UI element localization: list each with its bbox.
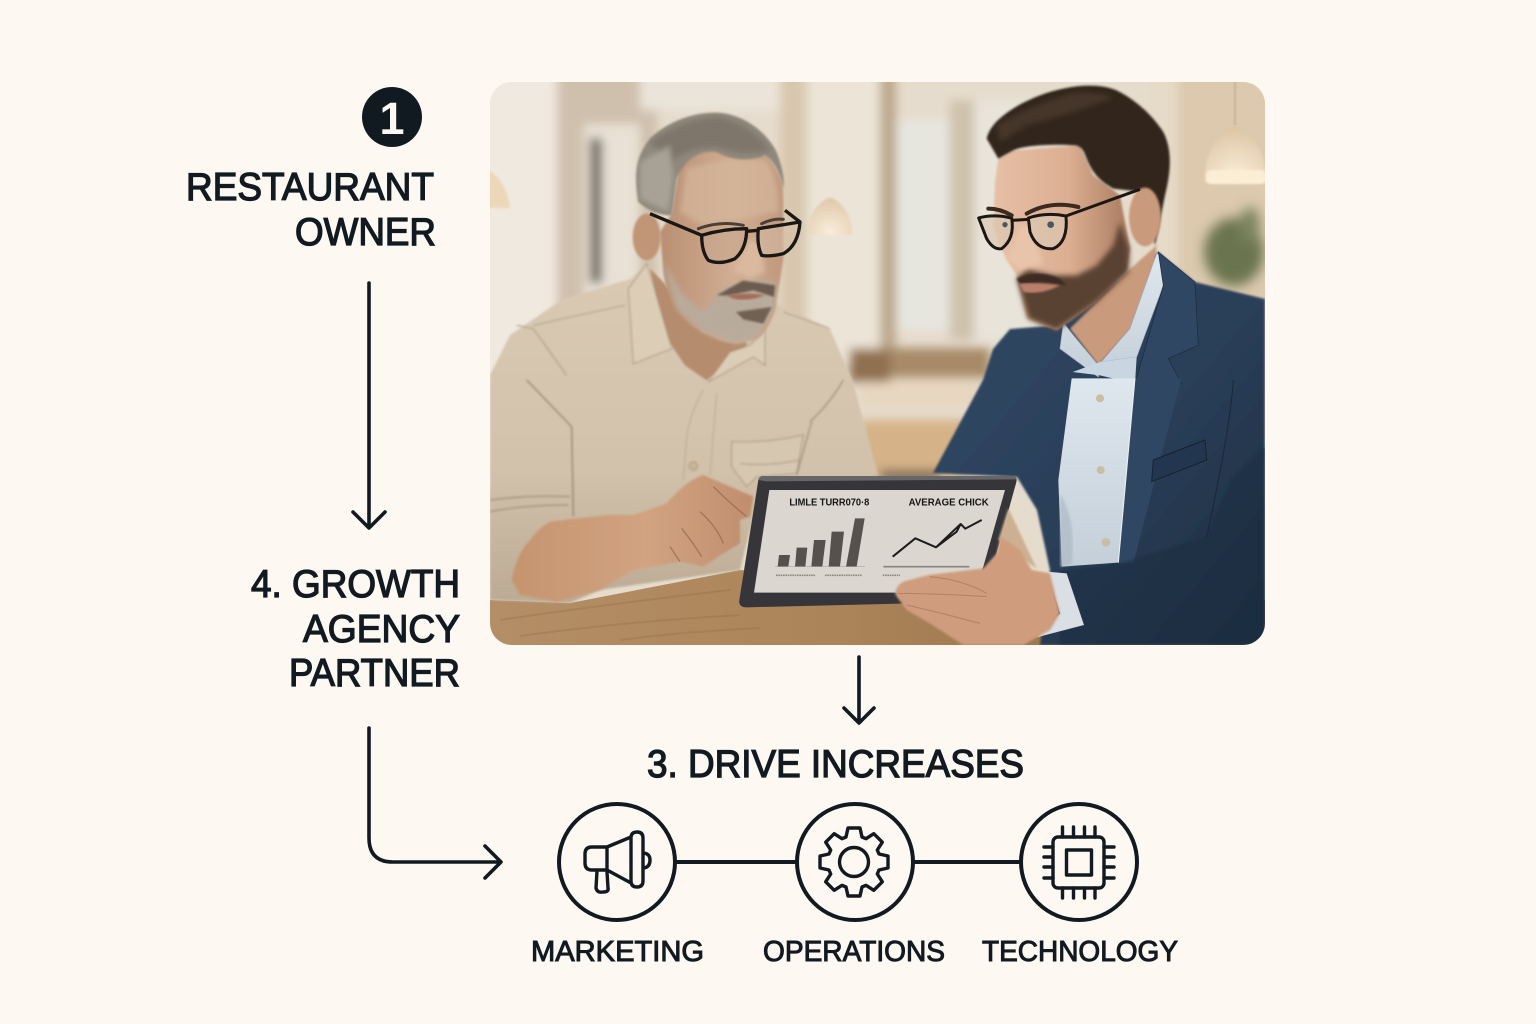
step 1 badge: 1: [379, 93, 405, 144]
man on right: hand holding tablet: [895, 508, 1084, 645]
heading: restaurant owner: RESTAURANT: [186, 166, 434, 209]
pendant lamps: [485, 82, 1266, 235]
dark hair: [987, 86, 1170, 245]
heading: restaurant owner: OWNER: [295, 211, 436, 254]
man on right: jacket: [933, 245, 1265, 645]
label: operations: OPERATIONS: [763, 936, 945, 968]
heading: restaurant owner: [186, 166, 436, 254]
nose: [1011, 226, 1042, 273]
beard: [1017, 222, 1129, 330]
neck: [650, 269, 747, 380]
tablet right chart title: AVERAGE CHICK: [909, 497, 989, 508]
connector lines between pillars: [676, 860, 1020, 864]
icon: megaphone: [559, 804, 675, 920]
heading: growth agency partner: 4. GROWTH: [251, 563, 460, 606]
label: technology: TECHNOLOGY: [982, 936, 1178, 968]
label: marketing: MARKETING: [531, 936, 704, 968]
tablet with charts: [739, 476, 1017, 607]
wood table: [490, 570, 1265, 645]
pillar: marketing: [531, 804, 704, 968]
ear: [1129, 188, 1161, 246]
grey hair: [636, 113, 784, 215]
face: [660, 148, 783, 344]
tablet left chart title: LIMLE TURR070·8: [789, 497, 870, 508]
eyes and brows: [988, 205, 1078, 215]
man on right: head: [979, 86, 1170, 330]
heading: drive increases: 3. DRIVE INCREASES: [647, 743, 1024, 786]
arrow: growth agency to pillars: [369, 728, 501, 878]
heading: growth agency partner: PARTNER: [289, 652, 460, 695]
shirt collar: [628, 264, 672, 364]
eyebrows: [698, 219, 783, 229]
tablet bar chart: [778, 518, 865, 567]
tablet line chart: [893, 520, 982, 557]
glasses: [979, 189, 1140, 249]
man on left: forearm and pointing hand: [512, 475, 753, 602]
ear: [633, 214, 661, 260]
heading: growth agency partner: [251, 563, 460, 695]
icon: microchip: [1021, 804, 1137, 920]
step 1 badge: [362, 87, 422, 147]
nose: [733, 239, 765, 279]
glasses: [650, 210, 800, 262]
photo: owner and consultant reviewing tablet: [480, 70, 1278, 645]
restaurant background: [480, 70, 1278, 645]
man on left: head: [628, 113, 800, 382]
man on left: shirt: [490, 264, 878, 603]
arrow: owner to growth agency: [353, 283, 385, 528]
background plant: [1204, 207, 1264, 286]
heading: growth agency partner: AGENCY: [303, 608, 460, 651]
grey beard: [663, 262, 775, 344]
pillar: operations: [763, 804, 945, 968]
arrow: photo to drive increases: [844, 657, 874, 723]
pillar: technology: [982, 804, 1178, 968]
icon: gear: [797, 804, 913, 920]
blue shirt and collar: [1060, 245, 1198, 384]
face: [993, 145, 1130, 330]
